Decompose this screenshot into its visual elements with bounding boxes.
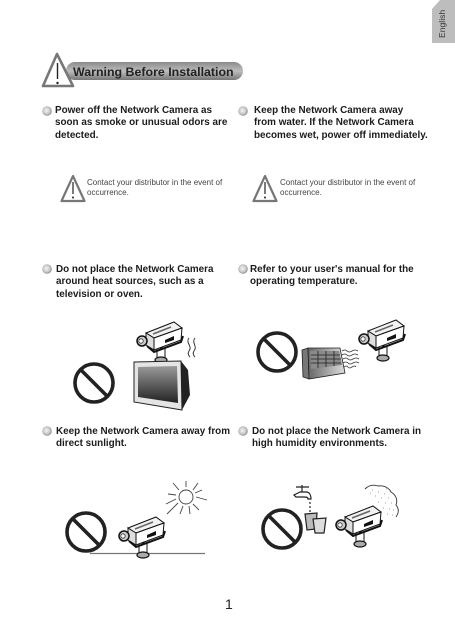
text: operating temperature: Refer to your user's manual for the [250,264,414,275]
language tab: English [437,10,447,38]
text: power off: Power off the Network Camera as [55,105,212,116]
illustration: camera above television [75,322,195,410]
icon: small warning left [62,176,84,201]
text: high humidity [252,426,421,449]
text: high humidity: high humidity environments. [252,438,387,449]
bullet icons [42,106,248,436]
text: keep away from water: becomes wet, power off immediately. [254,130,428,141]
text: direct sunlight: direct sunlight. [56,438,127,449]
text: keep away from water [254,105,428,141]
note: contact distributor right: Contact your distributor in the event of [280,178,415,187]
language tab [432,0,455,43]
illustration: camera under sun [67,481,207,558]
note: contact distributor right [280,178,416,197]
text: power off [55,105,227,141]
heading banner: Warning Before Installation [73,65,234,79]
text: high humidity: Do not place the Network Camera in [252,426,421,437]
text: direct sunlight [56,426,230,449]
note: contact distributor right: occurrence. [280,188,322,197]
note: contact distributor left [87,178,222,197]
icon: small warning right [254,176,276,201]
note: contact distributor left: occurrence. [87,188,129,197]
text: heat sources: around heat sources, such as a [56,276,204,287]
illustration: camera beside heater [258,320,405,379]
text: operating temperature [250,264,414,287]
heading banner [43,54,243,86]
text: keep away from water: from water. If the Network Camera [254,117,414,128]
text: heat sources [56,264,214,300]
text: heat sources: television or oven. [56,289,143,300]
note: contact distributor left: Contact your distributor in the event of [87,178,222,187]
page number: 1 [225,596,233,612]
illustration: camera with water and humid air [263,485,398,548]
text: operating temperature: operating temperature. [250,276,358,287]
text: power off: detected. [55,130,98,141]
text: keep away from water: Keep the Network Camera away [254,105,403,116]
text: power off: soon as smoke or unusual odors are [55,117,227,128]
text: direct sunlight: Keep the Network Camera away from [56,426,230,437]
text: heat sources: Do not place the Network Camera [56,264,214,275]
